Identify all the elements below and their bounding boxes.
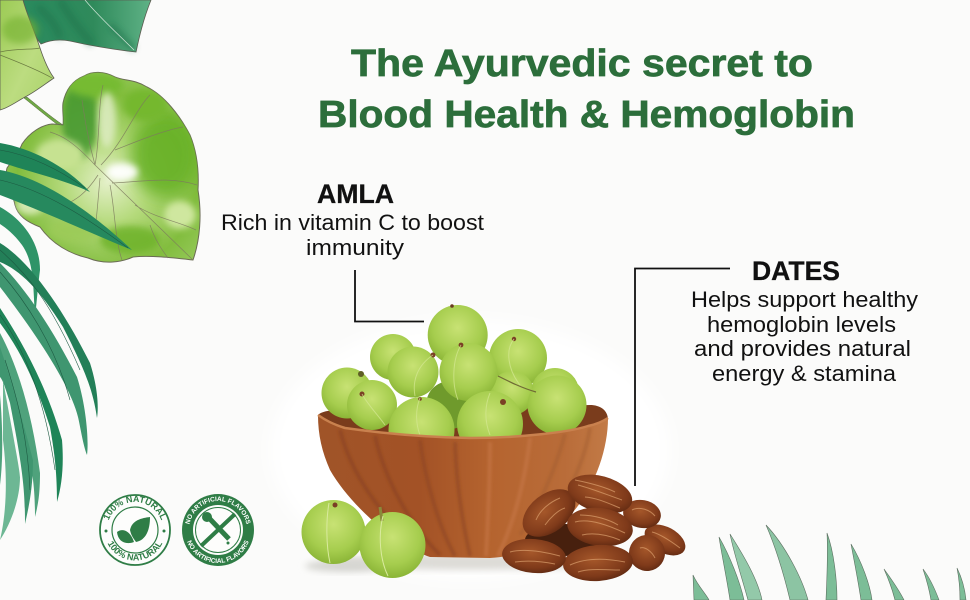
loose amla [302, 500, 426, 578]
top dark green leaf [23, 0, 151, 52]
amla callout text: AMLA [317, 179, 394, 209]
title: Blood Health & Hemoglobin [318, 94, 855, 136]
amla pile [322, 304, 586, 463]
pile of dates [501, 468, 691, 583]
bowl of amla [318, 304, 620, 570]
amla callout text: immunity [306, 235, 404, 260]
dates callout text: Helps support healthy [691, 287, 918, 312]
title [318, 43, 855, 136]
dates callout text: DATES [752, 256, 840, 286]
bowl shadow [320, 554, 620, 570]
amla callout text: Rich in vitamin C to boost [221, 210, 484, 235]
icon: crossed dropper [201, 512, 235, 546]
dates callout text [691, 256, 918, 386]
dates callout text: energy & stamina [712, 361, 897, 386]
large veined leaf [6, 72, 200, 262]
badge: no artificial flavors: NO ARTIFICIAL FLAVORS [187, 540, 248, 563]
badge: 100% natural [99, 494, 171, 566]
amla ribs [362, 339, 520, 435]
dates connector line [635, 268, 730, 486]
badge: 100% natural: 100% NATURAL [108, 541, 162, 560]
dates callout text: hemoglobin levels [707, 312, 896, 337]
title: The Ayurvedic secret to [351, 43, 813, 85]
bottom right palm blades [693, 525, 966, 600]
badge: 100% natural: 100% NATURAL [104, 496, 166, 520]
badge: no artificial flavors: NO ARTIFICIAL FLAVORS [185, 496, 250, 524]
leaf stem [24, 97, 63, 125]
dates callout text: and provides natural [694, 336, 911, 361]
date wrinkles [510, 480, 680, 572]
wooden bowl body [318, 415, 608, 558]
bowl front rim highlight [318, 415, 608, 438]
top left light green leaf [0, 0, 54, 110]
bowl back rim [318, 405, 608, 440]
palm fronds left [0, 143, 132, 540]
amla callout text [221, 179, 484, 260]
icon: twin leaves [117, 517, 150, 543]
amla connector line [355, 270, 424, 322]
badge: no artificial flavors [182, 494, 254, 566]
